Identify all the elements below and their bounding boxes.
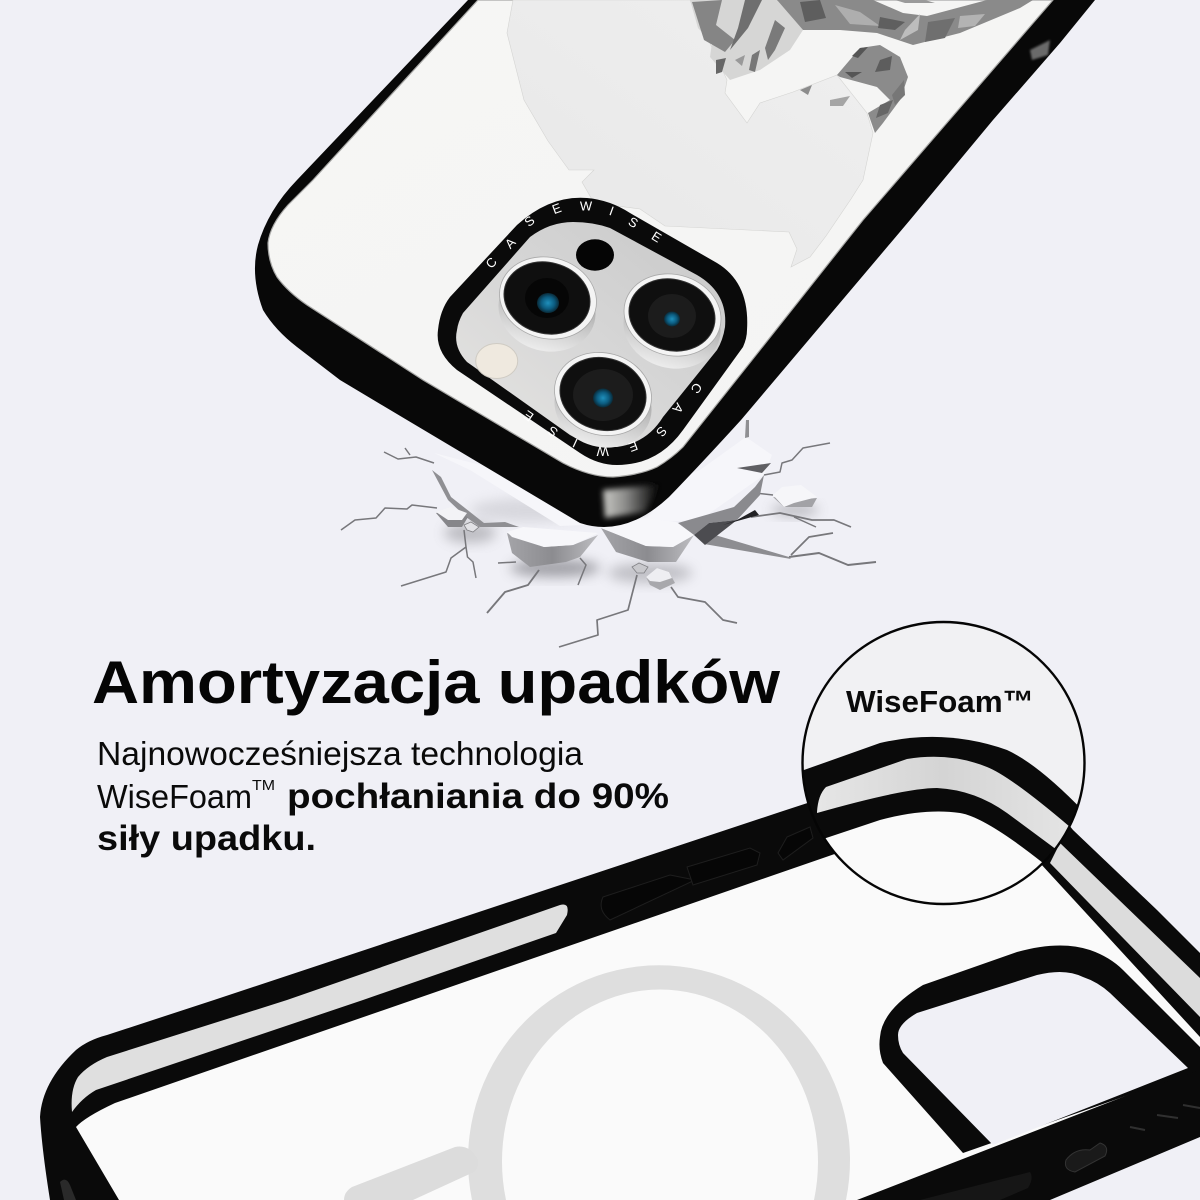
lens top-left: [489, 246, 606, 362]
camera plate: [456, 222, 725, 447]
description text: siły upadku.: [97, 819, 316, 858]
side buttons: [601, 827, 813, 920]
bottom phone case: [40, 740, 1200, 1200]
top phone case: [255, 0, 1095, 527]
magnifier callout: [790, 620, 1090, 910]
case black frame: [40, 740, 1200, 1200]
bottom port: [1065, 1143, 1107, 1172]
back art: grey texture patches: [690, 0, 1033, 133]
side button highlight: [1030, 40, 1050, 60]
crack impact illustration: [341, 420, 876, 647]
magnifier contents: [804, 736, 1077, 864]
description text: WiseFoam: [97, 778, 252, 815]
lens bottom: [545, 342, 661, 458]
description text: pochłaniania do 90%: [287, 777, 669, 816]
left side port: [60, 1180, 76, 1200]
clear back panel: [268, 0, 1053, 477]
case black bumper: [255, 0, 1095, 527]
clear inner panel: [76, 800, 1200, 1200]
inner grey strip right: [1050, 843, 1200, 1017]
inner grey strip left: [72, 904, 568, 1112]
MagSafe ring: [468, 965, 850, 1200]
description text: Najnowocześniejsza technologia: [97, 735, 584, 772]
island engraved brand text: CASEWISE: [482, 198, 664, 271]
bottom button: [920, 1172, 1032, 1200]
description text: TM: [252, 777, 275, 794]
back art: light silhouette: [507, 0, 873, 267]
heading: Amortyzacja upadków: [92, 649, 780, 716]
lens right: [614, 263, 730, 379]
flash: [476, 344, 518, 378]
MagSafe alignment pill: [344, 1147, 478, 1200]
description text: [97, 735, 669, 858]
island engraved brand text lower: CASEWISE: [520, 380, 705, 459]
camera island bumper: [438, 198, 747, 465]
magnifier label: WiseFoam™: [846, 684, 1034, 719]
bumper corner highlight: [603, 484, 660, 518]
microphone hole: [576, 239, 614, 271]
grip ribs: [1130, 1105, 1200, 1130]
camera cutout frame: [879, 945, 1200, 1153]
camera cutout window: [898, 972, 1188, 1145]
